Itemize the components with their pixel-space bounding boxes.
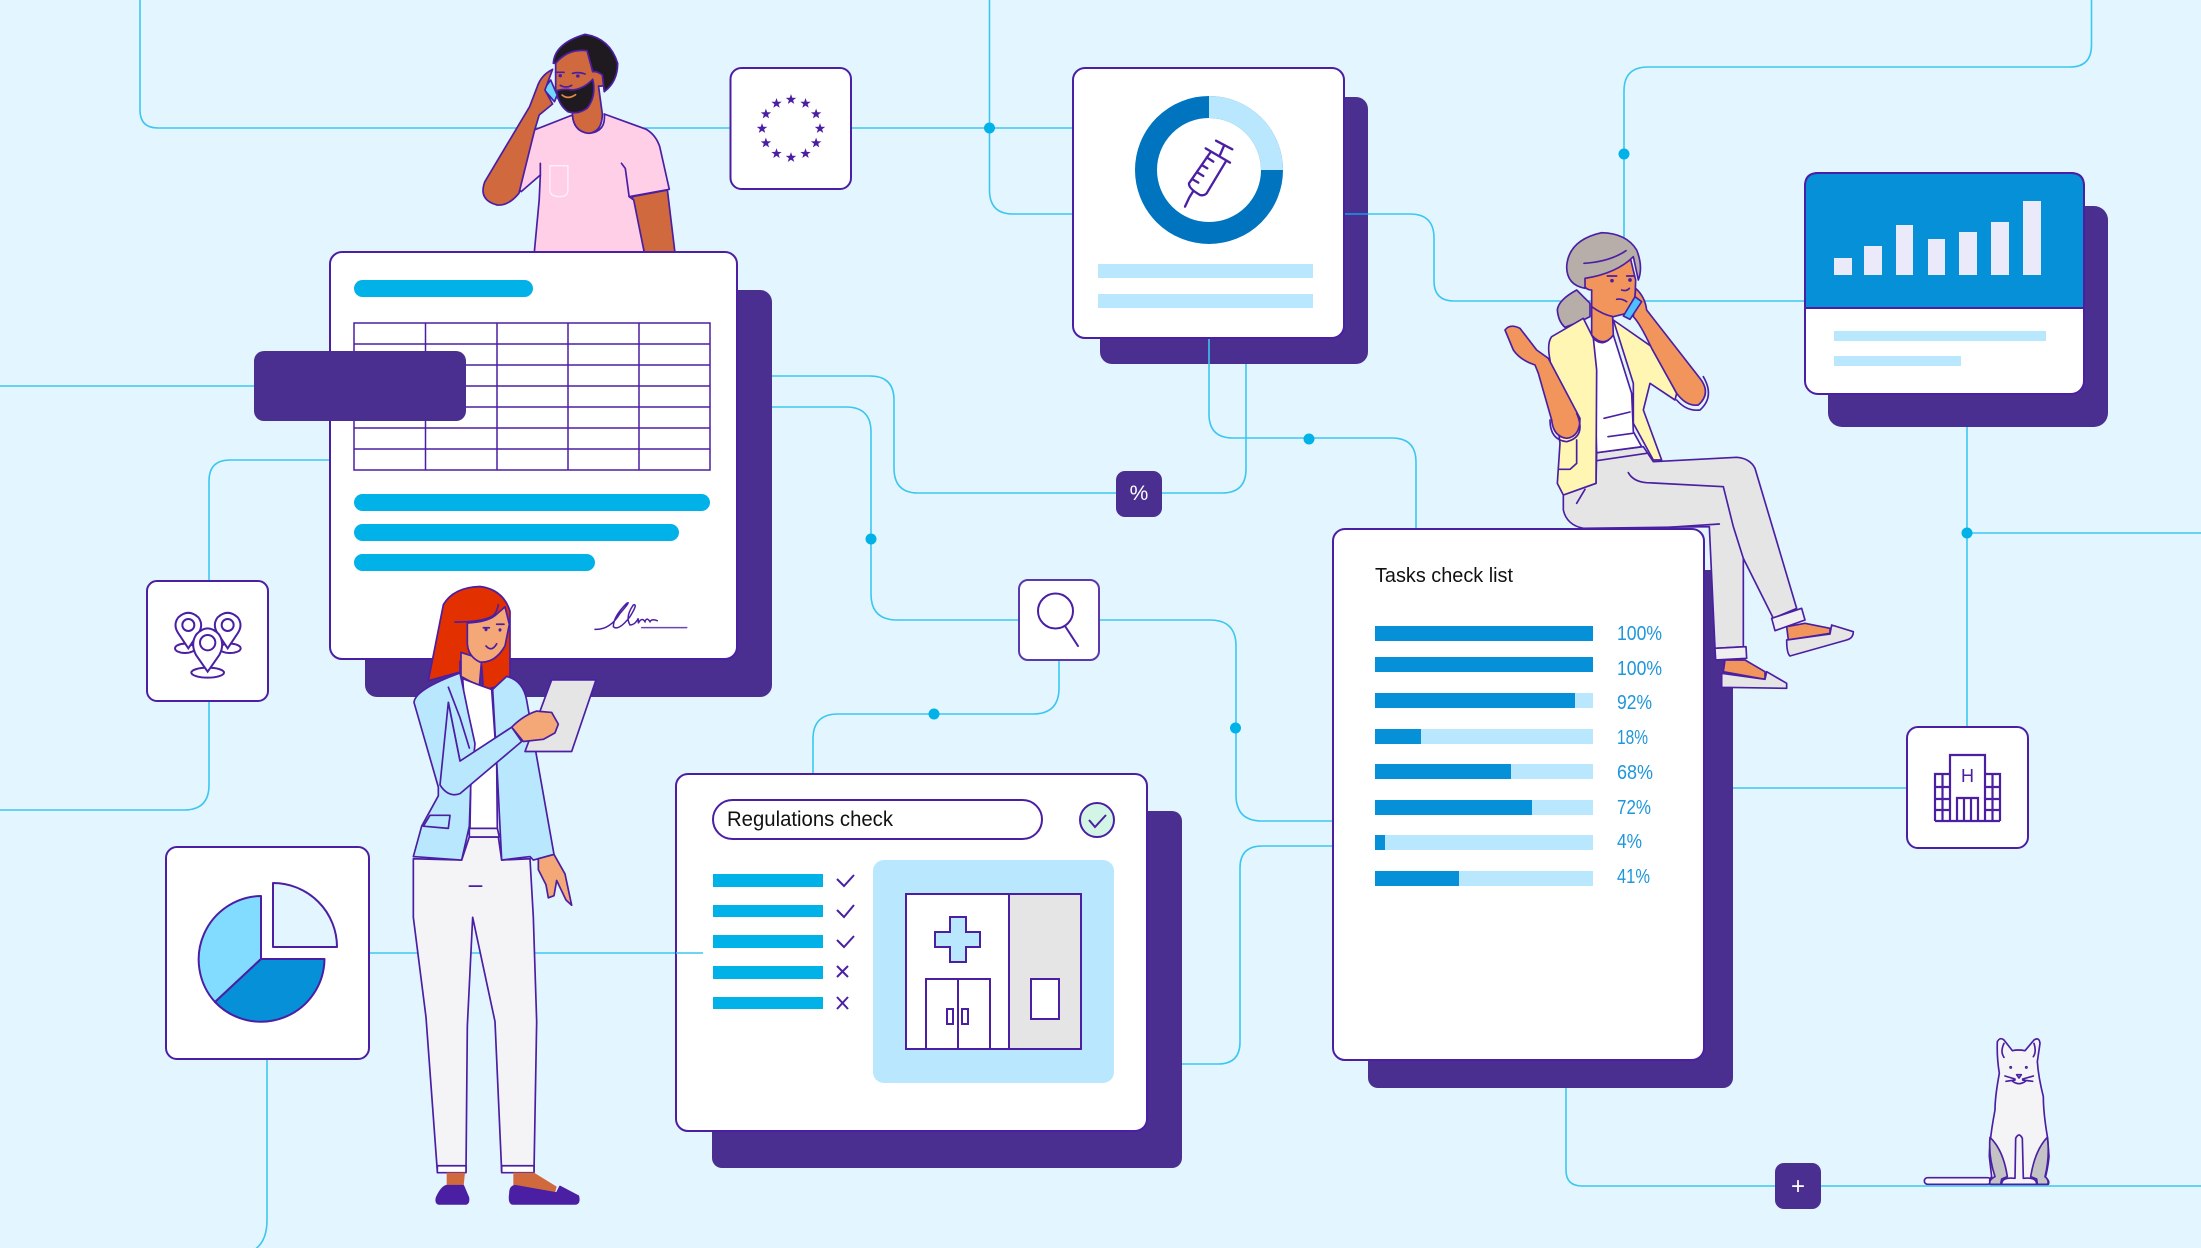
data table	[354, 323, 710, 470]
hospital illustration	[873, 860, 1114, 1083]
seated woman: raised phone arm	[1633, 288, 1705, 405]
woman: tablet	[525, 680, 596, 751]
progress percentages: 92%	[1617, 692, 1652, 714]
man: hair	[553, 34, 618, 92]
woman: top	[463, 679, 497, 828]
woman: raised sleeve	[440, 702, 522, 795]
panel: EU icon card	[730, 68, 851, 189]
connector nodes	[866, 122, 1972, 734]
man: sleeve crease	[540, 163, 629, 197]
panel: tasks check list	[1333, 529, 1704, 1060]
progress percentages: 41%	[1617, 866, 1650, 888]
progress tracks	[1375, 626, 1593, 886]
seated woman: phone	[1623, 297, 1642, 319]
icon: approved tick	[1080, 803, 1114, 837]
woman: waistband	[469, 828, 499, 837]
woman: face	[467, 607, 509, 662]
panel: pie chart card	[166, 847, 369, 1059]
man: eyes and brows	[556, 72, 585, 87]
progress percentages: 18%	[1617, 727, 1648, 749]
percent label: %	[1130, 482, 1148, 505]
seated woman: trouser creases	[1577, 453, 1743, 558]
seated woman: sleeve cuff left	[1550, 413, 1580, 442]
checklist lines	[713, 874, 823, 1009]
icon: map pins	[175, 613, 241, 678]
icon: hospital building	[1935, 755, 2000, 821]
cat: haunches	[1990, 1137, 2048, 1184]
search field	[713, 800, 1042, 839]
seated woman: gesturing arm	[1505, 326, 1580, 438]
cat: body	[1989, 1039, 2049, 1184]
progress percentages: 72%	[1617, 797, 1651, 819]
woman: shoes	[436, 1186, 579, 1204]
panel: vaccine donut card	[1073, 68, 1344, 338]
man: phone	[544, 80, 557, 102]
man: smile	[562, 95, 576, 97]
hospital letter: H	[1961, 766, 1974, 786]
cat: front legs	[2002, 1135, 2037, 1184]
woman: feet	[447, 1173, 557, 1193]
panel: search icon card	[1019, 580, 1099, 660]
panel: plus button	[1775, 1163, 1821, 1209]
seated woman: jacket pocket	[1558, 440, 1577, 469]
man: head and neck	[556, 50, 608, 133]
seated woman: eyes	[1611, 279, 1631, 282]
seated woman: hair strand and features	[1584, 251, 1634, 302]
panel: percent button	[1116, 471, 1162, 517]
checklist marks	[837, 875, 854, 1009]
seated woman: hair bun	[1557, 290, 1590, 327]
card text lines	[1098, 264, 1313, 308]
man: shirt pocket	[550, 166, 568, 197]
seated woman: trousers	[1563, 447, 1797, 648]
connector stub	[676, 952, 703, 954]
woman: fringe and features	[455, 605, 504, 649]
man: raised arm	[483, 69, 553, 205]
bar card header	[1805, 173, 2084, 308]
seated woman: neck	[1592, 303, 1613, 342]
progress percentages: 100%	[1617, 623, 1662, 645]
woman: neck	[461, 652, 482, 686]
woman: holding hand	[512, 711, 558, 742]
seated woman: face	[1583, 257, 1636, 317]
document text lines	[354, 494, 710, 571]
document card	[330, 252, 737, 659]
man: far arm	[632, 190, 675, 253]
person: seated woman on phone	[1505, 233, 1853, 688]
heading: tasks check list: Tasks check list	[1375, 565, 1513, 587]
woman: lower hand	[538, 854, 572, 905]
cat: face	[2002, 1043, 2035, 1084]
woman: lower pose trousers	[413, 837, 537, 1171]
progress percentages	[1617, 623, 1662, 888]
icon: syringe	[1185, 141, 1232, 207]
woman: blazer right side	[493, 676, 554, 860]
panel: document with table	[330, 252, 737, 659]
seated woman: shoes	[1722, 625, 1853, 688]
panel: bar chart card	[1805, 173, 2084, 394]
seated woman: sleeve cuff right	[1677, 377, 1708, 410]
panel shadows	[365, 97, 2108, 1168]
seated woman: jacket right	[1613, 320, 1677, 460]
person: man on phone	[483, 34, 675, 253]
woman: trouser cuffs	[437, 1166, 534, 1173]
document heading bar	[354, 280, 533, 297]
woman: pocket and lapel	[423, 687, 469, 828]
progress fills	[1375, 626, 1593, 886]
seated woman: ankles	[1723, 623, 1830, 679]
seated woman: shirt folds	[1604, 412, 1633, 437]
panel: regulations check card	[676, 774, 1147, 1131]
plus label: +	[1791, 1173, 1805, 1200]
woman: hair	[428, 586, 510, 689]
card text lines	[1834, 331, 2046, 366]
icon: cat	[1924, 1039, 2049, 1184]
progress percentages: 4%	[1617, 831, 1642, 853]
donut chart	[1146, 107, 1272, 233]
man: pink shirt	[518, 114, 669, 253]
seated woman: cuffs	[1715, 608, 1805, 660]
panel: location pins card	[147, 581, 268, 701]
cat: tail	[1924, 1178, 1991, 1184]
bar chart	[1834, 201, 2041, 275]
pie chart	[199, 883, 337, 1022]
panel: hospital icon card	[1907, 727, 2028, 848]
woman: blazer	[413, 673, 475, 860]
woman: front crease	[469, 885, 482, 887]
progress percentages: 100%	[1617, 658, 1662, 680]
purple tab block	[254, 351, 466, 421]
seated woman: hair	[1567, 233, 1640, 288]
signature	[595, 603, 687, 629]
seated woman: shirt	[1593, 335, 1642, 453]
icon: EU stars	[757, 94, 825, 162]
icon: magnifier	[1038, 594, 1078, 646]
man: beard	[556, 79, 594, 113]
heading: regulations check: Regulations check	[727, 807, 893, 831]
person: woman with tablet	[413, 586, 596, 1204]
progress percentages: 68%	[1617, 762, 1653, 784]
seated woman: jacket left	[1549, 318, 1597, 495]
